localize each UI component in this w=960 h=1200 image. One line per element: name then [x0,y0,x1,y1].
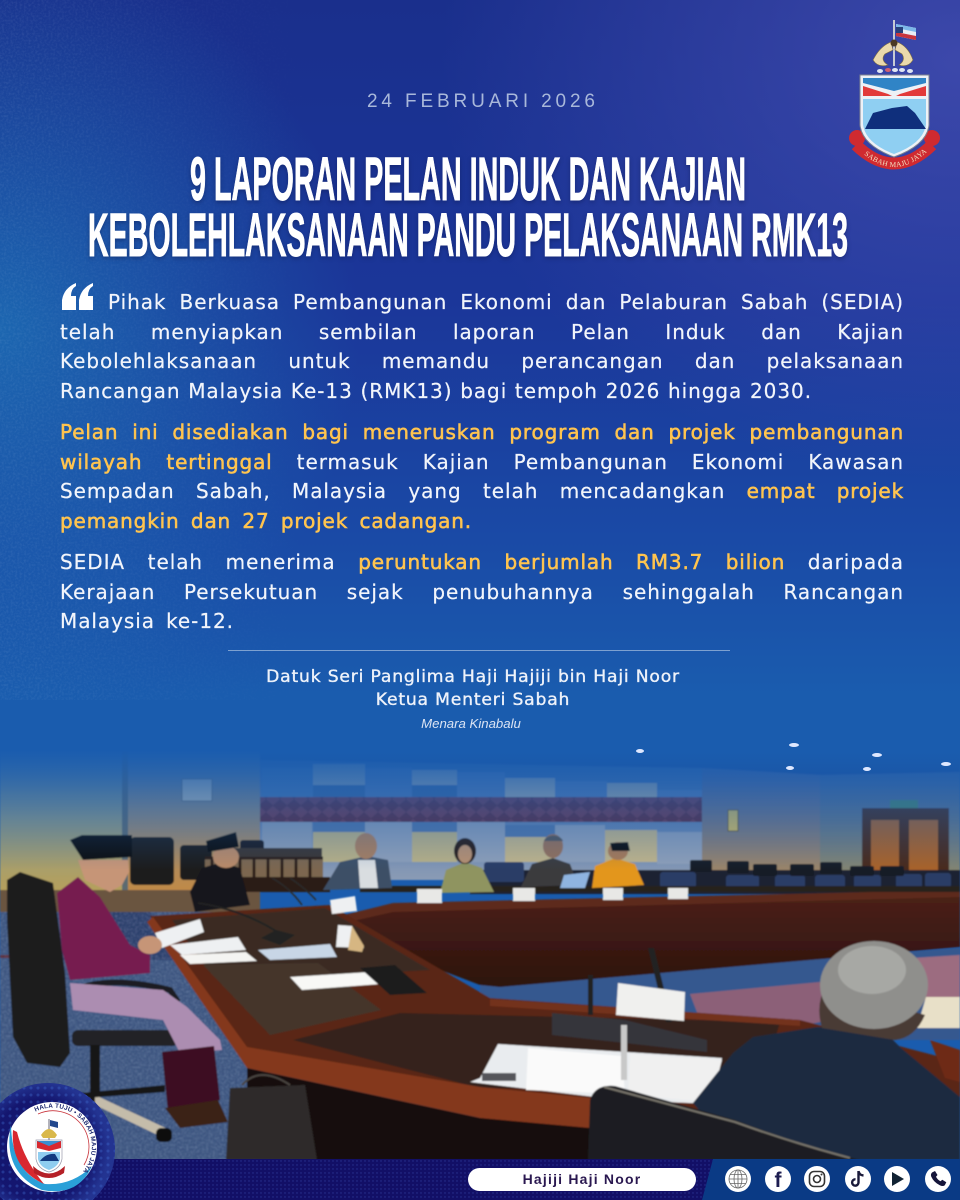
shield [860,75,929,157]
icon: facebook: f [774,1169,782,1192]
papers on the table [155,896,427,995]
paragraph 1: Pihak Berkuasa Pembangunan Ekonomi dan Pelaburan Sabah (SEDIA) [108,290,904,314]
hands and face [78,860,162,954]
meeting room photograph [0,722,960,1168]
nameplate at right [917,997,960,1028]
delegate in orange baju [592,842,644,888]
attribution: name and position [266,667,680,710]
delegate in batik shirt [521,834,590,888]
back row chairs [130,837,960,894]
location caption: Menara Kinabalu [421,716,521,731]
paragraph 1: telah menyiapkan sembilan laporan Pelan Induk dan Kajian [60,320,904,344]
delegate in green blouse [440,838,494,893]
motto ribbon [849,130,940,170]
main wooden table [147,905,960,1160]
footer name pill [468,1168,696,1191]
crossed arms [873,42,913,66]
paragraph 3: Malaysia ke-12. [60,609,234,633]
colour swoosh [9,1125,92,1191]
room walls and ceiling [0,722,960,912]
magenta baju melayu [57,877,150,980]
badge: Hala Tuju Sabah Maju Jaya [0,1083,115,1200]
delegate in black baju [190,832,250,912]
blue fade from background into photo [0,720,960,870]
flagpole and flag [893,20,916,66]
bottom footer bar [0,1159,960,1200]
foreground figure seen from behind [693,941,960,1160]
paragraph 2 [60,420,904,533]
attribution: name and position: Ketua Menteri Sabah [376,690,570,710]
paragraph 1: Kebolehlaksanaan untuk memandu perancangan dan pelaksanaan [60,349,904,373]
dark trousers and shoes [162,1046,228,1128]
divider [228,650,730,651]
seated delegates along the back table [190,832,688,912]
paragraph 2: pemangkin dan 27 projek cadangan. [60,509,472,533]
icon: phone [925,1166,951,1192]
wooden door with exit sign [862,800,949,878]
title [88,145,848,269]
state crest: Sabah Maju Jaya [849,20,940,170]
small crest [33,1119,65,1178]
delegate in grey suit [323,833,392,890]
office chair [7,872,178,1142]
main figure seated in black chair [7,835,228,1142]
handbag on floor [226,1075,317,1160]
ceiling lights [636,743,951,771]
footer name pill: Hajiji Haji Noor [523,1171,641,1187]
paragraph 3: Kerajaan Persekutuan sejak penubuhannya sehinggalah Rancangan [60,580,904,604]
motto ribbon: SABAH MAJU JAYA [864,150,927,168]
back wall panels and woven band [260,764,702,864]
icon: play [884,1166,910,1192]
table name plaques [417,888,688,903]
paragraph 1: Rancangan Malaysia Ke-13 (RMK13) bagi tempoh 2026 hingga 2030. [60,379,812,403]
paragraph 3: SEDIA telah menerima peruntukan berjumlah RM3.7 bilion daripada [60,550,904,574]
paragraph 2: wilayah tertinggal termasuk Kajian Pembangunan Ekonomi Kawasan [60,450,904,474]
ring text [36,1108,92,1184]
table microphone [198,878,316,945]
footer social icons [725,1166,951,1192]
paragraph 1 [60,290,904,403]
black songkok [70,835,132,860]
badge: Hala Tuju Sabah Maju Jaya: HALA TUJU • SABAH MAJU JAYA [34,1103,96,1173]
attribution: name and position: Datuk Seri Panglima Haji Hajiji bin Haji Noor [266,667,680,687]
microphone station and nameplate [552,948,707,1080]
icon: instagram [804,1166,830,1192]
patterned sampin [70,983,222,1053]
foreground chair back [588,1086,860,1160]
paragraph 2: Sempadan Sabah, Malaysia yang telah mencadangkan empat projek [60,479,904,503]
icon: globe [725,1166,751,1192]
carpet floor [0,912,960,1168]
back conference table [315,886,960,987]
icon: tiktok [845,1166,871,1192]
date: 24 FEBRUARI 2026 [367,91,598,112]
open binder on table [470,1044,722,1104]
quotation mark icon [62,283,93,310]
back row name plaques and cables [205,848,330,892]
icon: facebook [765,1166,791,1192]
paragraph 2: Pelan ini disediakan bagi meneruskan program dan projek pembangunan [60,420,904,444]
chain beads [877,68,913,73]
paragraph 3 [60,550,904,633]
